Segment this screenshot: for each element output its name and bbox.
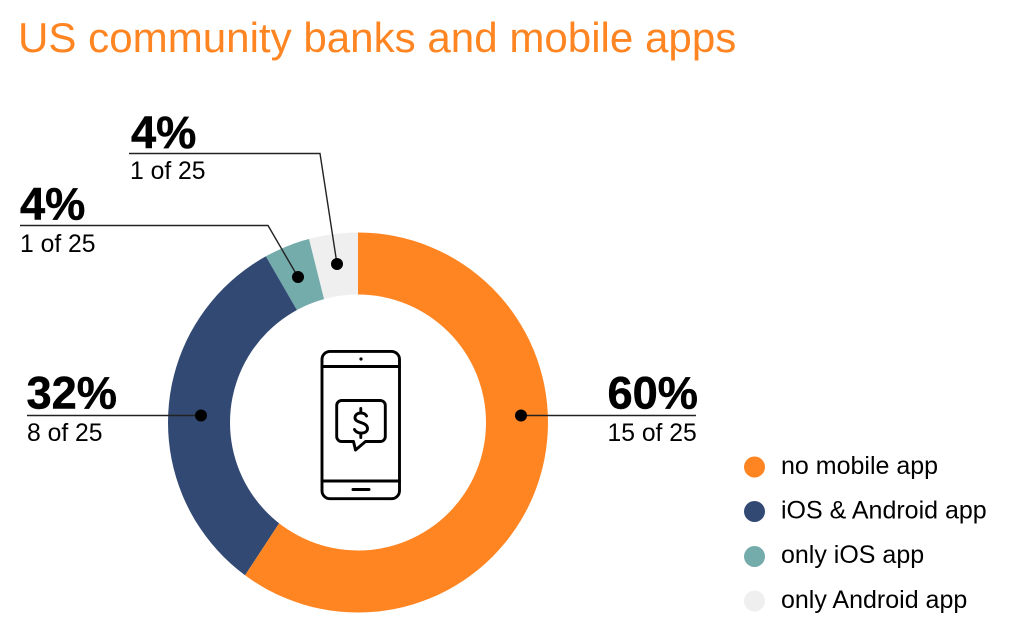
callout: 32% iOS and Android app: [26, 368, 207, 447]
callout: 4% only iOS app: 1 of 25: [20, 231, 96, 258]
callout: 4% only iOS app: [20, 178, 304, 283]
legend item: no mobile app: no mobile app: [781, 452, 938, 480]
donut hole: [230, 294, 486, 550]
callout: 4% only Android app: 1 of 25: [130, 158, 206, 185]
title: US community banks and mobile apps: [18, 14, 736, 61]
callout: 4% only Android app: [129, 107, 343, 270]
callout: 60% no mobile app: 15 of 25: [608, 420, 697, 447]
segment: only iOS app 4%: [266, 239, 324, 310]
callout: 60% no mobile app: 60%: [608, 368, 698, 418]
legend item: iOS & Android app: iOS & Android app: [781, 496, 987, 524]
icon: phone with dollar speech bubble: [322, 351, 400, 499]
legend item: only Android app: only Android app: [781, 586, 967, 614]
donut chart: [168, 232, 548, 612]
legend item: only iOS app: only iOS app: [781, 541, 924, 569]
callout: 4% only iOS app: 4%: [20, 178, 85, 230]
segment: iOS & Android app 32%: [168, 256, 297, 576]
callout: 32% iOS and Android app: 32%: [26, 368, 117, 418]
segment: only Android app 4%: [309, 232, 358, 299]
legend: [744, 452, 987, 614]
segment: no mobile app 60%: [245, 232, 548, 612]
callout: 4% only Android app: 4%: [131, 107, 196, 158]
callout: 32% iOS and Android app: 8 of 25: [27, 420, 102, 447]
callout: 60% no mobile app: [515, 368, 698, 447]
